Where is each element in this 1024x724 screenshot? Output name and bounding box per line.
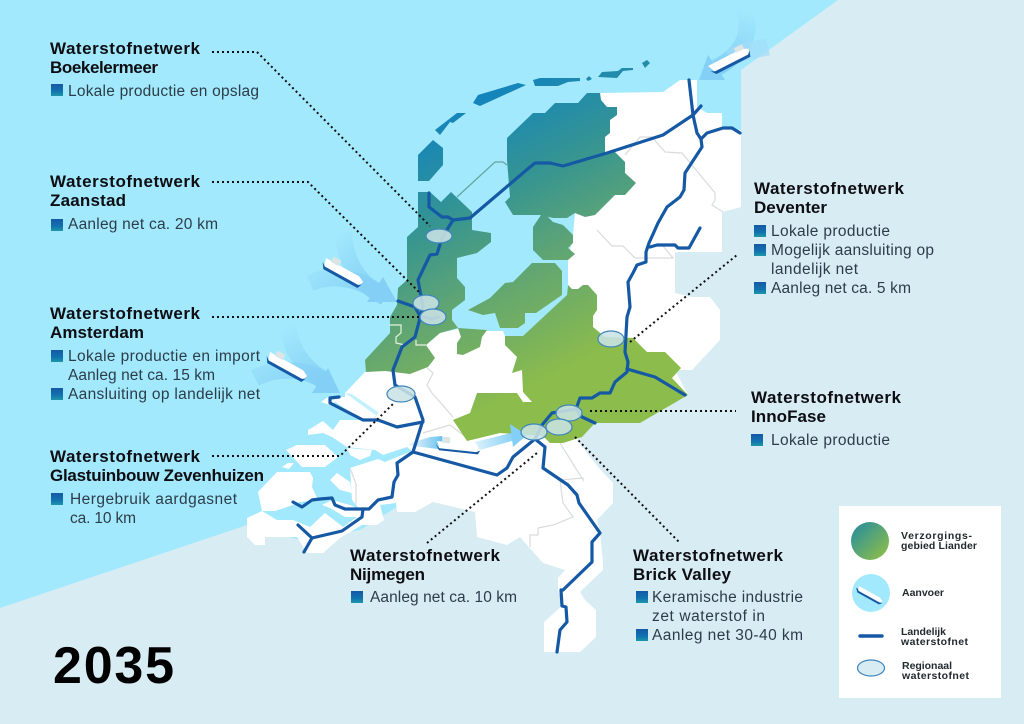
callout: Deventer: Lokale productie	[771, 223, 890, 240]
sea	[0, 0, 838, 608]
province borders	[350, 137, 723, 547]
callout: Brick Valley: Waterstofnetwerk	[633, 546, 784, 565]
arrow and ship: North Sea upper	[310, 232, 397, 302]
callout: Brick Valley	[633, 546, 803, 644]
callout: Glastuinbouw Zevenhuizen: ca. 10 km	[70, 510, 136, 527]
Liander service area	[365, 93, 688, 443]
callout: InnoFase	[751, 388, 902, 449]
callout: Amsterdam: Waterstofnetwerk	[50, 304, 201, 323]
callout: Zaanstad: Aanleg net ca. 20 km	[68, 216, 218, 233]
callout: Glastuinbouw Zevenhuizen	[50, 447, 264, 527]
legend: supply: Aanvoer	[902, 587, 944, 599]
callout: Deventer: Waterstofnetwerk	[754, 179, 905, 198]
arrow and ship: North Sea lower	[255, 325, 340, 393]
callout: Boekelermeer	[50, 39, 259, 100]
callout: Nijmegen	[350, 546, 517, 606]
callout: Nijmegen: Waterstofnetwerk	[350, 546, 501, 565]
callout: Glastuinbouw Zevenhuizen: Glastuinbouw Zevenhuizen	[50, 466, 264, 485]
arrow and ship: river	[405, 424, 527, 455]
map of the Netherlands	[247, 60, 741, 652]
callout: Zaanstad	[50, 172, 218, 233]
callout: Nijmegen: Aanleg net ca. 10 km	[370, 589, 517, 606]
callout: Zaanstad: Zaanstad	[50, 191, 126, 210]
Afsluitdijk	[457, 162, 507, 197]
callout: InnoFase: InnoFase	[751, 407, 826, 426]
legend: supply	[852, 574, 944, 612]
Wadden islands	[418, 60, 650, 181]
callout: Brick Valley: zet waterstof in	[652, 608, 765, 625]
callout: Deventer	[754, 179, 934, 297]
callout: Boekelermeer: Waterstofnetwerk	[50, 39, 201, 58]
legend: national network: Landelijk	[901, 626, 946, 638]
callout: Boekelermeer: Lokale productie en opslag	[68, 83, 259, 100]
callout: Amsterdam	[50, 304, 261, 403]
callout: Glastuinbouw Zevenhuizen: Waterstofnetwerk	[50, 447, 201, 466]
land	[308, 80, 741, 652]
callout: Brick Valley: Aanleg net 30-40 km	[652, 627, 803, 644]
legend: regional network: waterstofnet	[901, 670, 970, 682]
legend	[839, 506, 1001, 698]
legend: regional network	[858, 660, 970, 682]
municipal borders in green	[390, 325, 426, 345]
callout: Amsterdam: Aansluiting op landelijk net	[68, 386, 261, 403]
callout: Amsterdam: Aanleg net ca. 15 km	[68, 367, 215, 384]
callout: Amsterdam: Amsterdam	[50, 323, 144, 342]
callout: Deventer: Aanleg net ca. 5 km	[771, 280, 911, 297]
legend: national network: waterstofnet	[900, 636, 968, 648]
legend: service area: Verzorgings-	[901, 530, 972, 542]
callout: Glastuinbouw Zevenhuizen: Hergebruik aardgasnet	[70, 491, 238, 508]
regional hydrogen networks	[387, 229, 624, 440]
arrow and ship: north-east	[699, 10, 768, 80]
callout: Brick Valley: Keramische industrie	[652, 589, 803, 606]
callout: Zaanstad: Waterstofnetwerk	[50, 172, 201, 191]
dotted leader lines	[212, 52, 737, 543]
legend: national network	[860, 626, 968, 648]
callout: InnoFase: Lokale productie	[771, 432, 890, 449]
Zeeland islands	[247, 445, 372, 553]
Haringvliet streak	[345, 393, 378, 416]
callout: Amsterdam: Lokale productie en import	[68, 348, 261, 365]
callout: Deventer: landelijk net	[771, 261, 859, 278]
callout: Nijmegen: Nijmegen	[350, 565, 425, 584]
year title: 2035	[53, 637, 174, 695]
legend: service area: gebied Liander	[901, 540, 977, 552]
callout: Deventer: Mogelijk aansluiting op	[771, 242, 934, 259]
callout: Deventer: Deventer	[754, 198, 827, 217]
legend: regional network: Regionaal	[902, 660, 952, 672]
callout: Boekelermeer: Boekelermeer	[50, 58, 158, 77]
legend: service area	[851, 522, 977, 560]
callout: InnoFase: Waterstofnetwerk	[751, 388, 902, 407]
callout: Brick Valley: Brick Valley	[633, 565, 732, 584]
national hydrogen network	[293, 80, 740, 652]
